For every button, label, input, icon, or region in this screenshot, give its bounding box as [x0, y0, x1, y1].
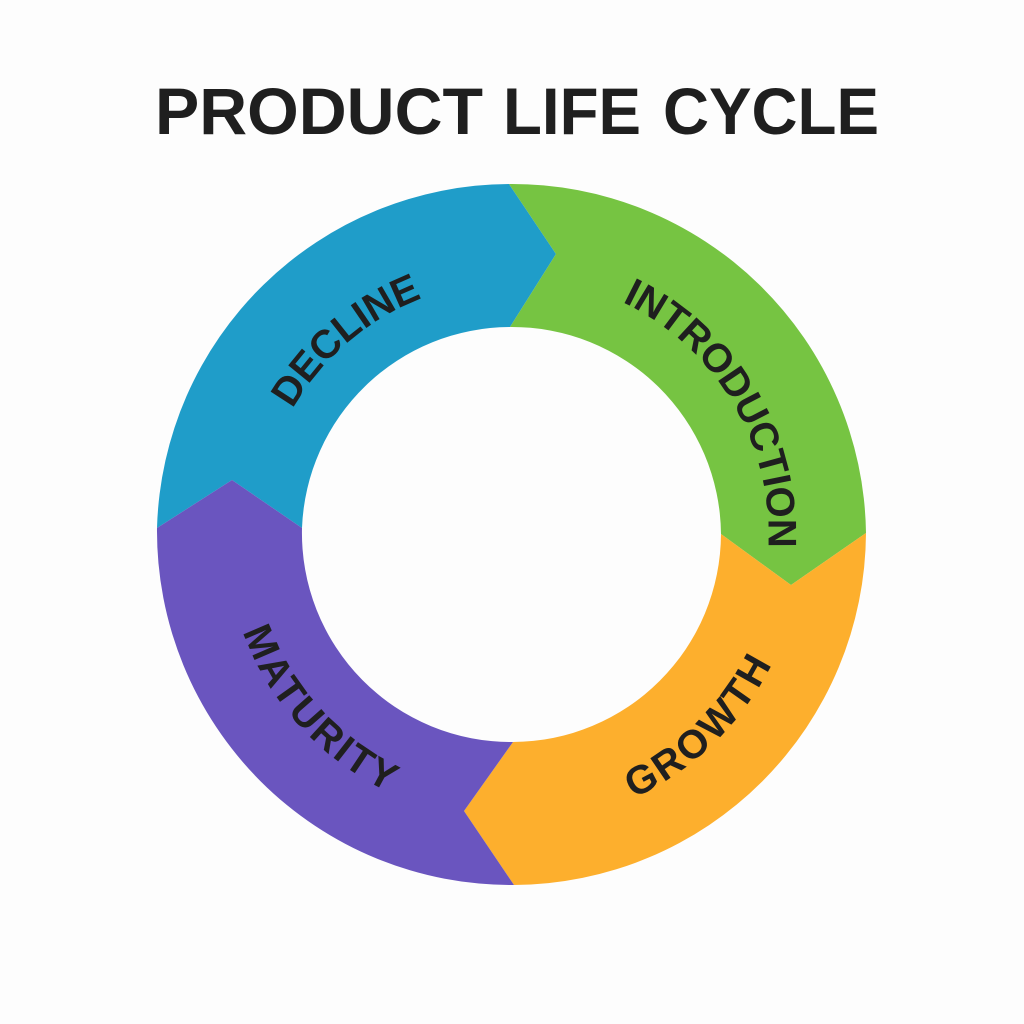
- segment: decline: [157, 184, 556, 528]
- title: LIFE: [503, 74, 641, 148]
- segment: decline: DECLINE: [270, 274, 421, 407]
- segment: maturity: MATURITY: [244, 624, 401, 788]
- title: [155, 74, 879, 148]
- segment: growth: [464, 533, 866, 885]
- segment: introduction: [509, 184, 866, 585]
- title: CYCLE: [663, 74, 879, 148]
- segment: growth: GROWTH: [626, 653, 771, 794]
- segment: introduction: INTRODUCTION: [624, 278, 796, 546]
- title: PRODUCT: [155, 74, 483, 148]
- segment: maturity: [157, 480, 514, 885]
- cycle ring: [157, 184, 866, 885]
